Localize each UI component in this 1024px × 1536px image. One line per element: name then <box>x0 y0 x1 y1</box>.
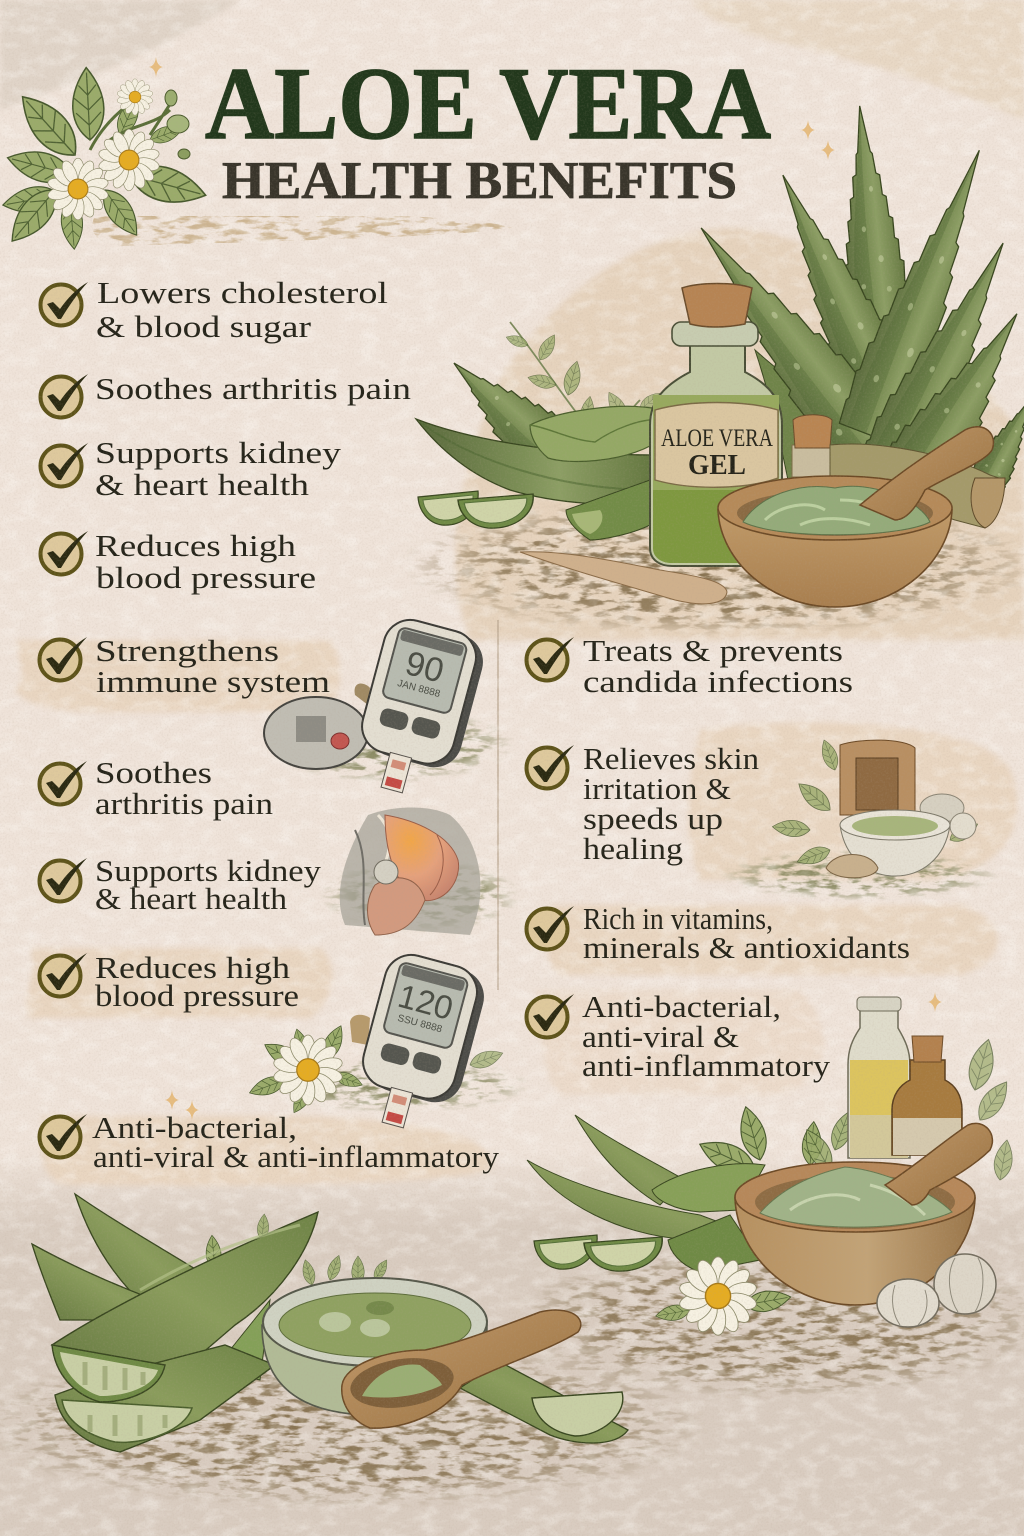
illustration: aloe fillets, jar and spoon bottom left <box>32 1194 628 1452</box>
benefit: rich in vitamins: Rich in vitamins, <box>583 901 773 936</box>
gel jar <box>262 1278 487 1415</box>
benefit: reduces high blood pressure 2: blood pressure <box>95 978 299 1013</box>
bottle label text: ALOE VERA <box>661 425 773 452</box>
big fillet <box>52 1212 318 1385</box>
cut leaf log right <box>830 444 1005 528</box>
benefit: anti-bacterial right: anti-inflammatory <box>582 1048 831 1083</box>
beige banners behind text <box>15 640 1017 1186</box>
benefit: lowers cholesterol: & blood sugar <box>96 309 312 344</box>
brush stroke under title <box>92 216 512 246</box>
benefit: anti-bacterial right <box>526 989 831 1083</box>
benefit: strengthens immune system: Strengthens <box>95 633 279 668</box>
bottle label text: GEL <box>688 450 746 481</box>
icon: floral corner bouquet <box>1 67 210 250</box>
big fillet cut end <box>52 1345 165 1402</box>
benefit: anti-bacterial right: Anti-bacterial, <box>582 989 781 1024</box>
subtitle: HEALTH BENEFITS <box>222 152 737 210</box>
meter: 120 <box>394 977 457 1027</box>
illustration: aloe plant, bottle and bowl <box>416 103 1024 607</box>
benefit: relieves skin irritation: Relieves skin <box>583 741 760 776</box>
herbs behind <box>694 1037 1016 1182</box>
benefit: supports kidney and heart 2: & heart health <box>95 881 288 916</box>
right fillet <box>460 1362 628 1443</box>
benefit: strengthens immune system <box>40 633 330 699</box>
wooden pestle <box>860 427 993 520</box>
benefit: rich in vitamins <box>526 901 910 965</box>
benefit: relieves skin irritation <box>526 741 760 866</box>
title: ALOE VERA <box>205 47 771 161</box>
benefit: supports kidney and heart 2 <box>40 853 322 916</box>
benefit: soothes arthritis pain 2: Soothes <box>95 755 212 790</box>
illustration: glucose meter and device <box>264 614 490 805</box>
meter: 90 <box>401 644 448 691</box>
illustration: inflamed joint <box>340 808 480 935</box>
benefit: treats candida: candida infections <box>583 664 853 699</box>
dirt ground patches <box>0 493 1024 1510</box>
benefit: reduces high blood pressure 2: Reduces high <box>95 950 291 985</box>
yellow oil bottle <box>848 997 910 1158</box>
small wooden spoon <box>520 552 727 604</box>
mortar bowl <box>735 1162 975 1305</box>
benefit: rich in vitamins: minerals & antioxidants <box>583 930 910 965</box>
small bottle <box>792 415 832 477</box>
illustration: oils, mortar and aloe bottom right <box>527 997 1016 1335</box>
benefit: relieves skin irritation: speeds up <box>583 801 723 836</box>
benefit: lowers cholesterol: Lowers cholesterol <box>97 275 388 310</box>
benefit: supports kidney and heart 2: Supports kidney <box>95 853 322 888</box>
benefit: supports kidney and heart: Supports kidney <box>95 435 342 470</box>
amber bottle <box>892 1036 962 1155</box>
benefit: lowers cholesterol <box>40 275 388 344</box>
wooden spoon <box>342 1310 581 1428</box>
benefit: soothes arthritis pain 2: arthritis pain <box>95 786 274 821</box>
benefit: anti-bacterial right: anti-viral & <box>582 1019 739 1054</box>
meter: JAN 8888 <box>396 678 442 700</box>
illustration: meter with daisy <box>247 949 505 1140</box>
benefit: relieves skin irritation: healing <box>583 831 683 866</box>
benefit: treats candida: Treats & prevents <box>583 633 843 668</box>
benefit: reduces high blood pressure: blood pressure <box>96 560 316 595</box>
benefit: treats candida <box>526 633 853 699</box>
meter <box>348 949 491 1140</box>
meter <box>347 614 490 805</box>
bottle label text <box>661 425 773 481</box>
mortar bowl <box>718 476 952 607</box>
herb sprigs <box>205 1214 391 1286</box>
aloe plant <box>669 103 1024 515</box>
benefit: reduces high blood pressure: Reduces high <box>95 528 297 563</box>
benefit: soothes arthritis pain <box>40 371 412 418</box>
herb leaves <box>247 1022 505 1116</box>
sparkles <box>149 57 942 1120</box>
benefit: supports kidney and heart <box>40 435 342 502</box>
daisy <box>654 1257 792 1335</box>
benefit: anti-bacterial left: Anti-bacterial, <box>92 1110 297 1145</box>
device <box>264 697 368 769</box>
title <box>205 47 771 210</box>
pestle <box>885 1123 992 1205</box>
benefit: reduces high blood pressure 2 <box>40 950 299 1013</box>
gel bottle <box>650 284 782 566</box>
column divider <box>497 620 499 990</box>
benefit: supports kidney and heart: & heart health <box>95 467 310 502</box>
illustration: skin care bowl <box>772 738 981 878</box>
benefit: soothes arthritis pain 2 <box>40 755 274 821</box>
benefit: anti-bacterial left: anti-viral & anti-inflammatory <box>93 1139 500 1174</box>
benefit: soothes arthritis pain: Soothes arthritis pain <box>95 371 412 406</box>
cut aloe leaves <box>416 339 655 540</box>
benefit: relieves skin irritation: irritation & <box>583 771 731 806</box>
garlic bulbs <box>877 1254 996 1327</box>
back leaves <box>32 1194 270 1380</box>
lower fillet <box>55 1345 275 1452</box>
herb sprigs behind <box>505 322 664 465</box>
benefit: strengthens immune system: immune system <box>96 664 330 699</box>
aloe leaves <box>527 1115 765 1272</box>
benefit: reduces high blood pressure <box>40 528 316 595</box>
benefit: anti-bacterial left <box>40 1110 500 1174</box>
meter: SSU 8888 <box>396 1013 444 1035</box>
